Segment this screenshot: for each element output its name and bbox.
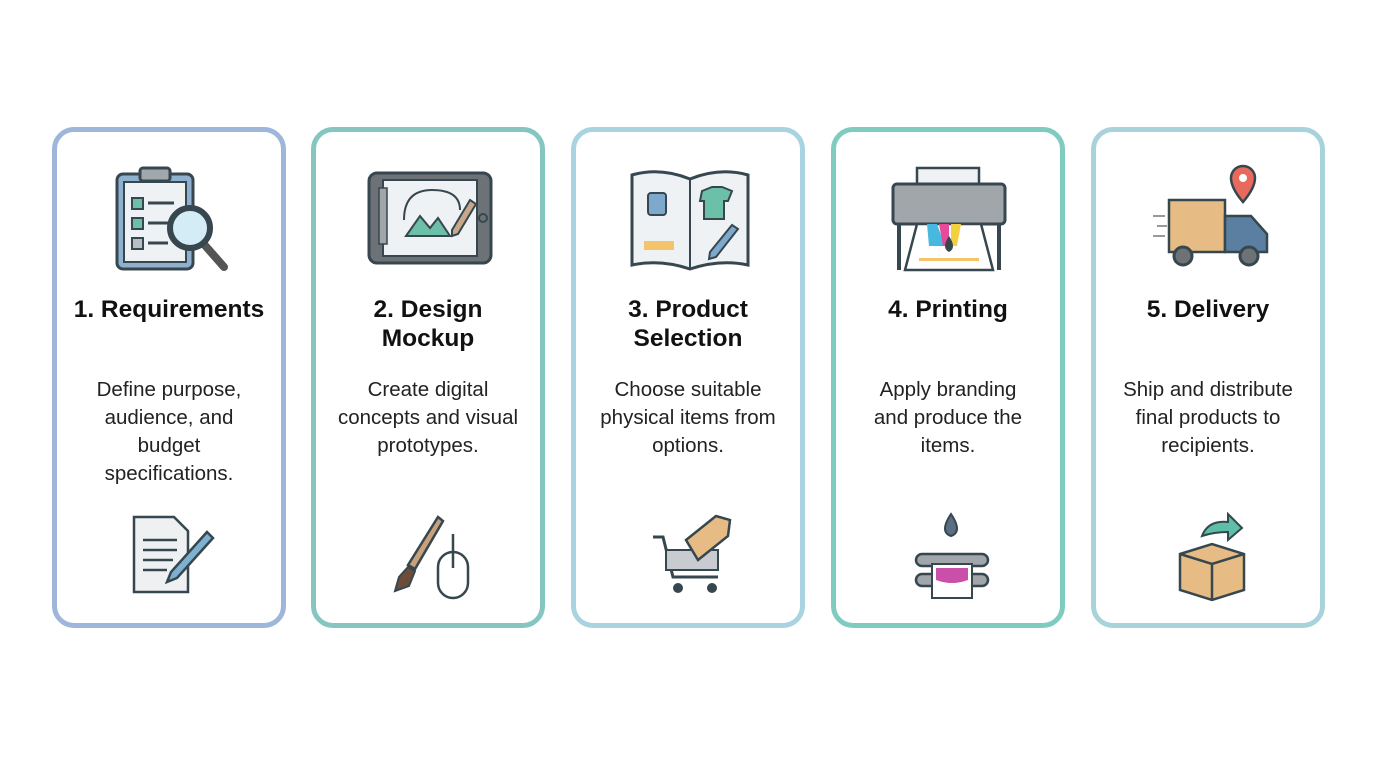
description xyxy=(338,378,518,457)
description: recipients. xyxy=(1161,434,1255,457)
description: Ship and distribute xyxy=(1123,378,1293,401)
card: printing xyxy=(831,127,1065,628)
card: design mockup xyxy=(311,127,545,628)
description: Create digital xyxy=(368,378,488,401)
icon: document with pen xyxy=(132,516,215,594)
description: Choose suitable xyxy=(614,378,762,401)
description: concepts and visual xyxy=(338,406,518,429)
card: delivery xyxy=(1091,127,1325,628)
icon: cart with tag xyxy=(653,514,732,593)
description: prototypes. xyxy=(377,434,479,457)
description: options. xyxy=(652,434,724,457)
description: items. xyxy=(921,434,975,457)
description: Apply branding xyxy=(880,378,1016,401)
title: 4. Printing xyxy=(888,296,1008,323)
description xyxy=(874,378,1022,457)
icon: brush and mouse xyxy=(394,515,470,600)
card: requirements xyxy=(52,127,286,628)
description: audience, and xyxy=(105,406,233,429)
description xyxy=(600,378,776,457)
description: specifications. xyxy=(105,462,233,485)
description: budget xyxy=(138,434,200,457)
icon: large format printer xyxy=(892,166,1006,272)
title xyxy=(628,296,748,352)
icon: tablet with drawing xyxy=(368,172,492,264)
title xyxy=(374,296,482,352)
title: 2. Design xyxy=(374,296,482,323)
title: 3. Product xyxy=(628,296,748,323)
description: final products to xyxy=(1136,406,1280,429)
description xyxy=(1123,378,1293,457)
icon: box with arrow xyxy=(1178,512,1246,602)
description xyxy=(97,378,241,485)
card: product selection xyxy=(571,127,805,628)
description: Define purpose, xyxy=(97,378,241,401)
description: physical items from xyxy=(600,406,776,429)
title: Selection xyxy=(634,325,742,352)
title: 5. Delivery xyxy=(1147,296,1269,323)
icon: clipboard with magnifier xyxy=(116,166,228,271)
icon: catalog book xyxy=(630,170,750,271)
title: Mockup xyxy=(382,325,474,352)
icon: truck with pin xyxy=(1153,164,1268,266)
icon: ink roller xyxy=(914,512,990,599)
description: and produce the xyxy=(874,406,1022,429)
title: 1. Requirements xyxy=(74,296,264,323)
